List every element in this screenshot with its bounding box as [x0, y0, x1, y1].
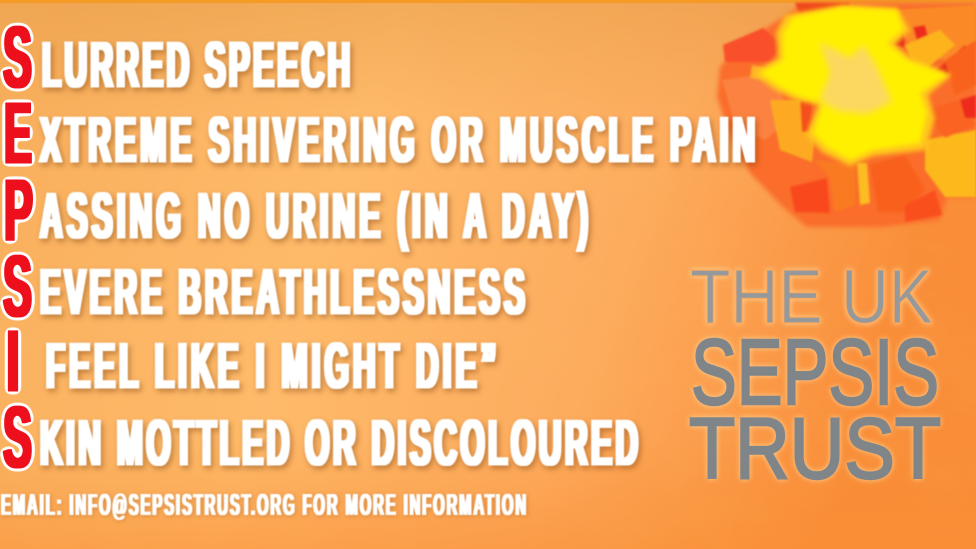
panel: sepsis symptoms list: E: [4, 85, 32, 182]
red acrostic letters: I: [6, 313, 20, 410]
symptom lines: FEEL LIKE I MIGHT DIE”: [46, 329, 496, 402]
symptom lines: [40, 28, 755, 479]
contact line: EMAIL: INFO@SEPSISTRUST.ORG FOR MORE INFORMATION: [1, 488, 526, 523]
symptom lines: KIN MOTTLED OR DISCOLOURED: [40, 406, 638, 479]
symptom lines: XTREME SHIVERING OR MUSCLE PAIN: [40, 103, 755, 176]
symptom lines: ASSING NO URINE (IN A DAY): [40, 179, 588, 252]
red acrostic letters: S: [3, 389, 32, 486]
panel: sepsis symptoms list: P: [4, 162, 33, 259]
symptom lines: EVERE BREATHLESSNESS: [40, 255, 525, 328]
red acrostic letters: S: [3, 9, 32, 106]
red acrostic letters: [3, 9, 33, 486]
logo: The UK Sepsis Trust: TRUST: [689, 401, 941, 497]
symptom lines: LURRED SPEECH: [42, 28, 350, 101]
icon: sun burst: [717, 3, 976, 227]
logo: The UK Sepsis Trust: THE UK: [690, 254, 933, 340]
logo: The UK Sepsis Trust: [689, 254, 941, 497]
panel: sepsis symptoms list: [3, 9, 755, 486]
red acrostic letters: S: [3, 238, 32, 335]
